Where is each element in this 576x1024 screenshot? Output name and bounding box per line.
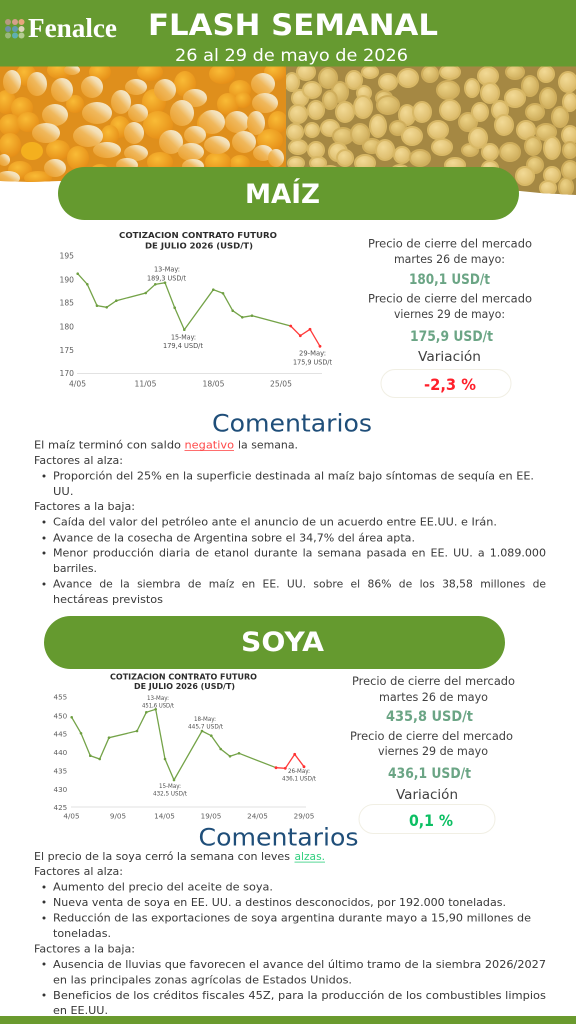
variation label: Variación xyxy=(396,788,458,803)
annotation: 15-May: 15-May: xyxy=(171,332,196,342)
price 26 May: 435,8 USD/t xyxy=(386,709,473,725)
section heading: SOYA: SOYA xyxy=(241,627,324,658)
price 26 May: martes 26 de mayo xyxy=(379,691,488,704)
price 26 May: 180,1 USD/t xyxy=(409,272,490,288)
x axis labels: 4/05 xyxy=(69,380,86,388)
x axis labels xyxy=(63,812,314,820)
chart title: DE JULIO 2026 (USD/T) xyxy=(134,682,235,691)
chart title: COTIZACION CONTRATO FUTURO xyxy=(119,231,277,240)
annotation: 15-May: 179,4 USD/t xyxy=(163,341,203,350)
line: green series xyxy=(76,272,291,331)
text block: soy comments: Reducción de las exportaciones de soya argentina durante mayo a 15,90 millones de xyxy=(53,912,531,924)
text block: soy comments: Factores al alza: xyxy=(34,865,123,878)
text block: maize comments: Caída del valor del petróleo ante el anuncio de un acuerdo entre EE.UU. e Irán. xyxy=(53,516,497,528)
annotation: 29-May: 175,9 USD/t xyxy=(293,358,332,366)
photo: soybeans xyxy=(285,64,576,196)
y axis labels: 170 xyxy=(60,369,74,378)
chart title: DE JULIO 2026 (USD/T) xyxy=(145,242,253,250)
text block: maize comments: Menor producción diaria de etanol durante la semana pasada en EE. UU. a 1.089.000 xyxy=(53,546,546,560)
variation value: 0,1 % xyxy=(409,811,453,830)
line: red series xyxy=(289,325,321,348)
annotation: 26-May xyxy=(282,767,316,782)
y axis labels: 430 xyxy=(54,785,68,794)
price 29 May: Precio de cierre del mercado xyxy=(368,292,532,306)
x axis labels: 14/05 xyxy=(154,812,175,820)
text block: maize comments: hectáreas previstos xyxy=(53,593,163,606)
footer band xyxy=(0,1016,576,1024)
annotation: 29-May xyxy=(293,348,332,366)
text block: soy comments: Aumento del precio del aceite de soya. xyxy=(53,880,273,894)
chart title: COTIZACION CONTRATO FUTURO xyxy=(110,672,257,682)
y axis labels: 425 xyxy=(54,803,67,812)
annotation: 18-May: 18-May: xyxy=(194,715,216,723)
y axis labels: 455 xyxy=(54,692,67,702)
y axis labels: 435 xyxy=(54,766,67,775)
price 29 May: 175,9 USD/t xyxy=(410,329,493,345)
panel: maize closing prices xyxy=(368,238,532,398)
price 29 May: Precio de cierre del mercado xyxy=(350,730,513,743)
y axis labels xyxy=(60,252,74,378)
price 26 May: martes 26 de mayo: xyxy=(394,253,505,266)
price 29 May xyxy=(368,292,532,345)
x axis labels: 18/05 xyxy=(203,380,225,388)
variation label: Variación xyxy=(418,350,481,365)
section heading: SOYA xyxy=(44,616,505,669)
text block: maize comments: la semana. xyxy=(238,438,298,452)
text block: maize comments: Proporción del 25% en la superficie destinada al maíz bajo síntomas de sequía en EE. xyxy=(53,470,534,482)
text block: maize comments: El maíz terminó con saldo xyxy=(34,438,181,452)
annotation: 13-May: 13-May: xyxy=(154,264,180,274)
panel: soy closing prices xyxy=(350,675,515,834)
line: red series xyxy=(275,753,305,770)
subtitle: dates: 26 al 29 de mayo de 2026 xyxy=(175,46,408,65)
text block: soy comments: Nueva venta de soya en EE. UU. a destinos desconocidos, por 192.000 toneladas. xyxy=(53,896,506,909)
x axis labels: 11/05 xyxy=(135,380,157,388)
price 26 May: Precio de cierre del mercado xyxy=(352,675,515,688)
y axis labels: 445 xyxy=(54,730,67,738)
text block: soy comments: Factores a la baja: xyxy=(34,942,135,956)
y axis labels: 450 xyxy=(54,712,68,720)
annotation: 26-May: 436,1 USD/t xyxy=(282,774,316,782)
text block: soy comments: alzas. xyxy=(294,850,325,863)
annotation: 26-May: 26-May: xyxy=(288,767,310,775)
text block: maize comments: Factores a la baja: xyxy=(34,500,135,513)
annotation: 15-May: 15-May: xyxy=(159,782,181,790)
price 26 May xyxy=(352,675,515,725)
heading: Comentarios (soy): Comentarios xyxy=(198,824,358,852)
text block: maize comments: barriles. xyxy=(53,562,97,575)
variation value: -2,3 % xyxy=(424,375,476,394)
text block: soy comments: en las principales zonas agrícolas de Estados Unidos. xyxy=(53,974,352,986)
chart title xyxy=(110,672,257,691)
chart: soy futures xyxy=(54,672,316,820)
chart title xyxy=(119,231,277,250)
text block: maize comments: Avance de la siembra de maíz en EE. UU. sobre el 86% de los 38,58 millones de xyxy=(53,578,546,590)
x axis labels: 4/05 xyxy=(63,812,80,820)
y axis labels xyxy=(54,692,68,812)
annotation: 15-May xyxy=(153,782,187,798)
x axis labels: 19/05 xyxy=(201,812,221,820)
y axis labels: 190 xyxy=(60,276,74,284)
price 26 May: Precio de cierre del mercado xyxy=(368,238,532,250)
price 29 May: 436,1 USD/t xyxy=(388,766,471,782)
text block: soy comments xyxy=(34,850,546,1017)
x axis labels: 29/05 xyxy=(294,812,314,820)
x axis labels: 24/05 xyxy=(247,812,268,820)
price 29 May: viernes 29 de mayo: xyxy=(394,308,505,321)
price 29 May: viernes 29 de mayo xyxy=(378,745,488,758)
heading: Comentarios (maize): Comentarios xyxy=(212,410,372,438)
chart: maize futures xyxy=(60,231,332,388)
annotation: 13-May: 451,6 USD/t xyxy=(142,702,174,710)
text block: soy comments: El precio de la soya cerró la semana con leves xyxy=(34,850,290,863)
logo: Fenalce: Fenalce xyxy=(28,13,117,43)
price 26 May xyxy=(368,238,532,288)
annotation: 15-May: 432,5 USD/t xyxy=(153,790,187,798)
text block: soy comments: Ausencia de lluvias que favorecen el avance del último tramo de la siembra 2026/2027 xyxy=(53,958,546,971)
x axis labels: 25/05 xyxy=(270,380,292,388)
header band xyxy=(0,0,576,66)
annotation: 18-May xyxy=(188,715,223,730)
annotation: 13-May xyxy=(147,264,186,282)
variation value xyxy=(359,804,495,834)
y axis labels: 175 xyxy=(60,346,74,355)
text block: soy comments: toneladas. xyxy=(53,927,111,940)
y axis labels: 180 xyxy=(60,322,74,332)
variation value xyxy=(381,370,511,398)
annotation: 13-May xyxy=(142,694,174,710)
photo: corn kernels xyxy=(0,61,288,185)
y axis labels: 440 xyxy=(54,748,68,757)
x axis labels: 9/05 xyxy=(110,812,126,820)
section heading: MAÍZ xyxy=(58,167,519,220)
section heading: MAÍZ: MAÍZ xyxy=(245,178,320,210)
text block: maize comments: Avance de la cosecha de Argentina sobre el 34,7% del área apta. xyxy=(53,532,415,544)
annotation: 15-May xyxy=(163,332,203,350)
annotation: 13-May: 189,3 USD/t xyxy=(147,274,186,282)
text block: soy comments: Beneficios de los créditos fiscales 45Z, para la producción de los combustibles limpios xyxy=(53,989,546,1002)
text block: maize comments xyxy=(34,438,546,606)
text block: maize comments: negativo xyxy=(184,438,234,452)
annotation: 13-May: 13-May: xyxy=(147,694,169,702)
annotation: 18-May: 445,7 USD/t xyxy=(188,722,223,730)
text block: soy comments: en EE.UU. xyxy=(53,1004,108,1017)
annotation: 29-May: 29-May: xyxy=(299,348,326,358)
line: green series xyxy=(70,708,276,781)
text block: maize comments: Factores al alza: xyxy=(34,454,123,467)
price 29 May xyxy=(350,730,513,782)
x axis labels xyxy=(69,380,292,388)
text block: maize comments: UU. xyxy=(53,485,74,498)
y axis labels: 195 xyxy=(60,252,74,260)
title: FLASH SEMANAL xyxy=(148,8,438,42)
y axis labels: 185 xyxy=(60,298,74,308)
